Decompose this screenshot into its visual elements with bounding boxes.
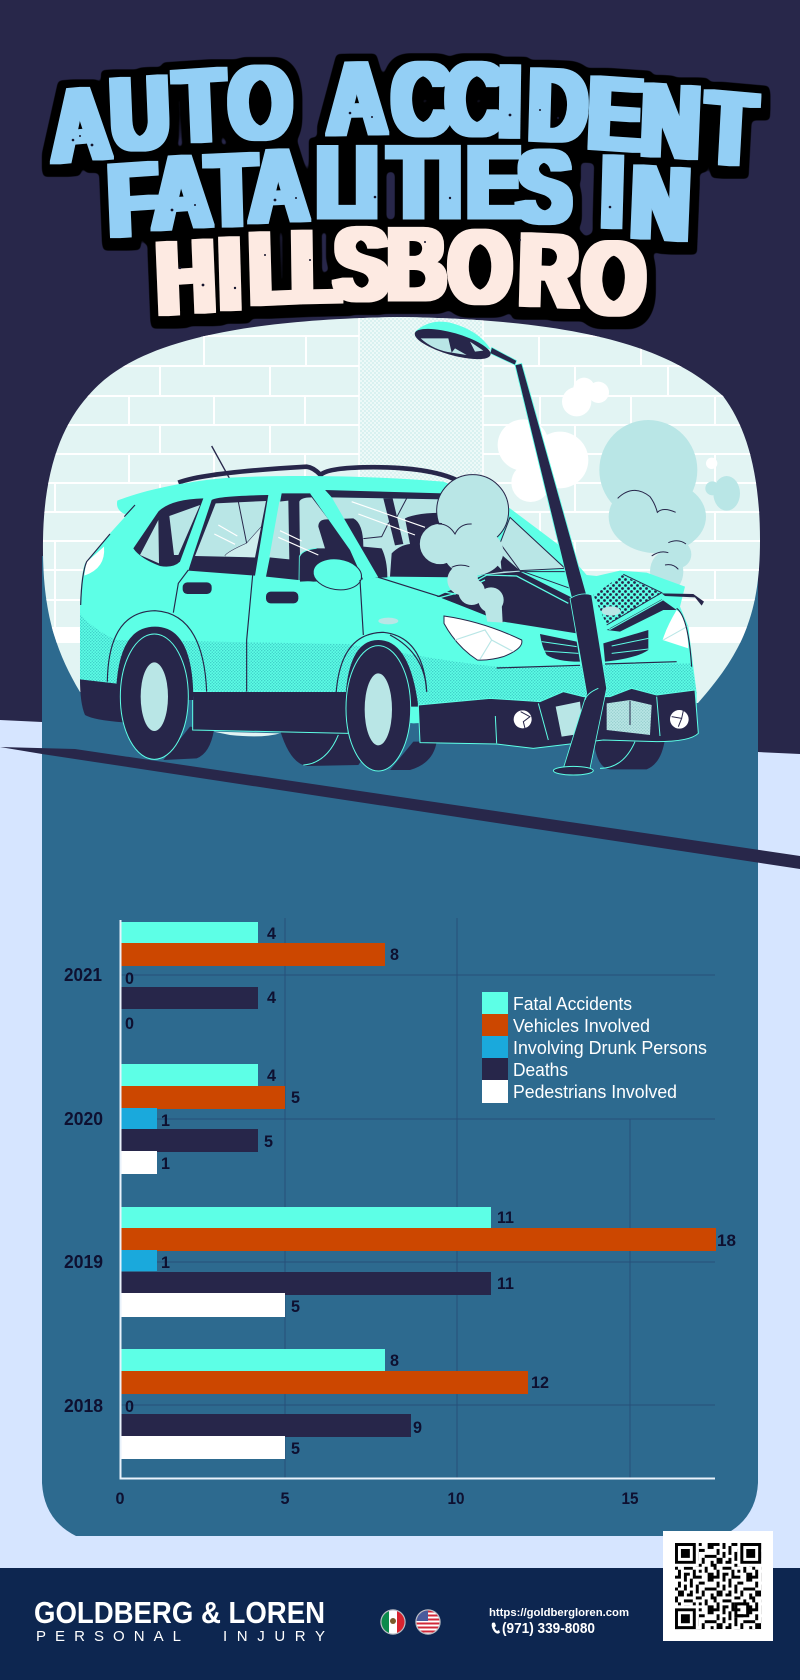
white clouds and background smoke [498, 378, 740, 592]
bar chart [64, 918, 736, 1508]
chart group 2020 [120, 1064, 285, 1174]
front wheel [390, 742, 437, 770]
legend: Vehicles Involved [513, 1015, 650, 1036]
year labels: 2018 [64, 1396, 103, 1416]
chart group 2021 [120, 922, 385, 1009]
road diagonal stripe [0, 747, 800, 869]
title line 1: AUTO ACCIDENT [48, 40, 759, 189]
icon: phone [492, 1622, 500, 1634]
taillight [84, 547, 104, 576]
value labels: 4 [267, 924, 277, 943]
pale windshield right [500, 517, 565, 571]
chart group 2019 [120, 1207, 716, 1317]
x axis labels: 15 [622, 1489, 638, 1508]
chart axes [120, 920, 715, 1478]
wheel arches [107, 611, 427, 695]
legend: Involving Drunk Persons [513, 1037, 707, 1058]
roof rails [178, 467, 460, 483]
foreground smoke from engine [419, 475, 509, 623]
front parts in right-hand coordinates [390, 517, 704, 748]
year labels: 2020 [64, 1109, 103, 1129]
value labels: 4 [267, 1066, 277, 1085]
lamp arm [490, 347, 517, 365]
value labels: 4 [267, 988, 277, 1007]
x axis labels: 0 [116, 1489, 124, 1508]
value labels: 18 [717, 1231, 736, 1250]
chart group 2018 [120, 1349, 528, 1459]
value labels: 8 [390, 1351, 399, 1370]
phone number: (971) 339-8080 [502, 1621, 595, 1637]
value labels: 11 [497, 1208, 514, 1227]
door lines and handles [173, 570, 503, 692]
value labels: 0 [125, 1014, 134, 1033]
street lamp [412, 322, 607, 775]
value labels [125, 924, 736, 1458]
side sill [193, 692, 348, 733]
value labels: 1 [161, 1154, 170, 1173]
title line 2: FATALITIES IN [106, 124, 692, 263]
under-car light strip [213, 732, 280, 736]
title line 3: HILLSBORO [154, 206, 648, 339]
lamp pole upper [515, 363, 587, 598]
right headlight [663, 610, 688, 648]
value labels: 5 [291, 1439, 300, 1458]
value labels: 1 [161, 1111, 170, 1130]
value labels: 5 [291, 1088, 300, 1107]
value labels: 12 [531, 1373, 549, 1392]
logo: INJURY [223, 1628, 325, 1645]
logo: GOLDBERG & LOREN [34, 1595, 325, 1630]
year labels [64, 965, 103, 1416]
bumper openings [556, 702, 583, 737]
icon: Mexico flag [380, 1609, 406, 1635]
rear wheel [120, 634, 188, 759]
rear door window [188, 495, 268, 576]
car body [80, 476, 697, 723]
windshield [332, 497, 520, 577]
crumpled hood [593, 575, 662, 625]
legend: Pedestrians Involved [513, 1081, 677, 1102]
chart gridlines [120, 918, 715, 1478]
logo: PERSONAL [36, 1628, 181, 1645]
car interior dark [390, 513, 503, 577]
illustration: crashed car [80, 446, 704, 771]
legend: Fatal Accidents [513, 993, 632, 1014]
logo [34, 1595, 325, 1645]
lamp pole sleeve and base [553, 594, 607, 775]
A-pillar [310, 490, 378, 580]
car antenna [212, 446, 230, 479]
value labels: 11 [497, 1274, 514, 1293]
value labels: 9 [413, 1418, 422, 1437]
side mirror [311, 556, 364, 593]
front bumper [418, 688, 698, 748]
rear quarter window [133, 498, 203, 567]
title [48, 40, 759, 339]
lamp head [415, 322, 491, 349]
x axis labels: 10 [448, 1489, 464, 1508]
year labels: 2021 [64, 965, 102, 985]
value labels: 0 [125, 1397, 134, 1416]
value labels: 5 [264, 1132, 273, 1151]
navy upper backdrop [0, 0, 800, 754]
halftone lower body [80, 613, 697, 707]
seat [300, 518, 387, 582]
footer band [0, 1568, 800, 1680]
value labels: 1 [161, 1253, 170, 1272]
x axis labels: 5 [280, 1489, 290, 1508]
value labels: 0 [125, 969, 134, 988]
panel: chart background [42, 556, 758, 1536]
icon: USA flag [415, 1609, 441, 1635]
website url: https://goldbergloren.com [489, 1607, 629, 1619]
value labels: 8 [390, 945, 399, 964]
engine cavity [437, 572, 581, 634]
rear bumper piece [80, 679, 123, 722]
front door window [266, 493, 373, 582]
fog lights [514, 710, 532, 728]
year labels: 2019 [64, 1252, 103, 1272]
rear tires behind the body [163, 727, 665, 769]
grille [540, 630, 648, 662]
legend: Deaths [513, 1059, 568, 1080]
brick wall window [30, 310, 770, 710]
QR code [663, 1531, 773, 1641]
legend [482, 992, 707, 1103]
x axis labels [116, 1489, 638, 1508]
title speckles [72, 109, 611, 289]
left headlight [444, 616, 522, 660]
value labels: 5 [291, 1297, 300, 1316]
